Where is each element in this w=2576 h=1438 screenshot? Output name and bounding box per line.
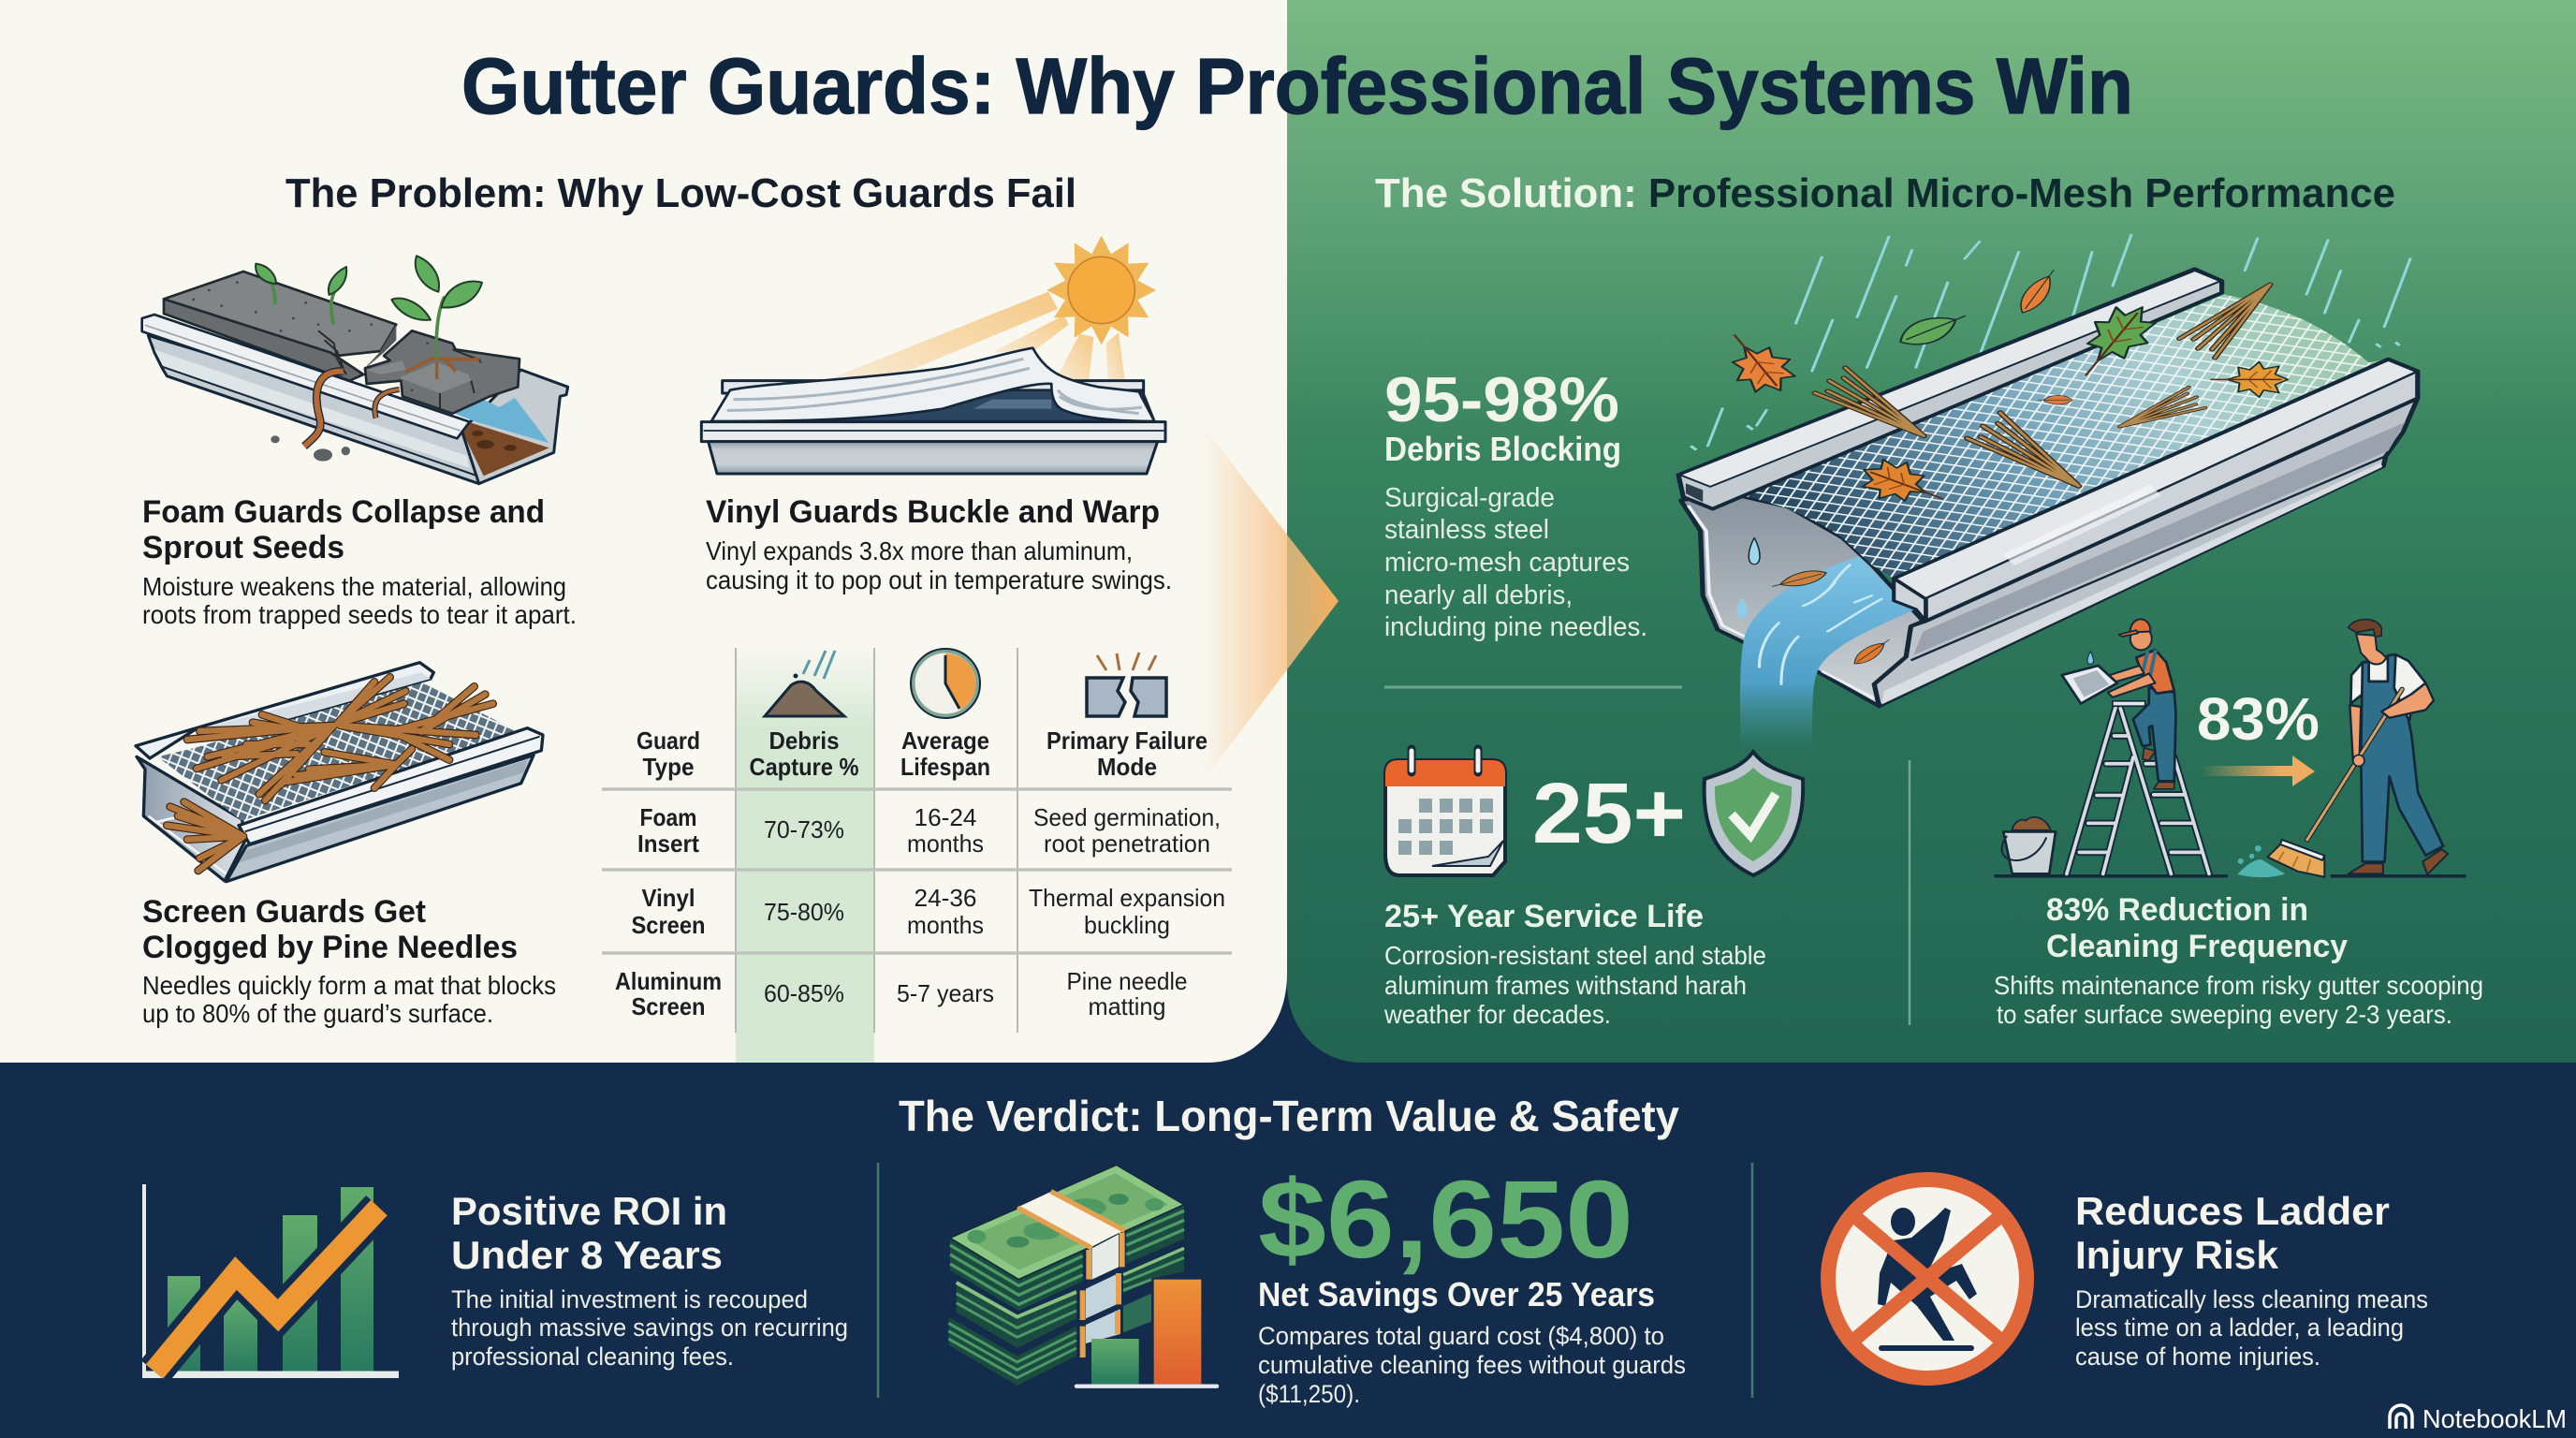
text: ladder injury risk: cause of home injuries. [2075,1343,2320,1371]
stat: $6,650 net savings: Net Savings Over 25 Years [1258,1275,1655,1313]
icon: vinyl guard buckling under the sun [701,236,1165,474]
table row: aluminum screen: matting [1088,992,1166,1020]
text: service life [1383,899,1766,1029]
icon: screen guard clogged by pine needles [136,663,543,882]
table row: aluminum screen: 5-7 years [897,979,994,1007]
text: screen guards: up to 80% of the guard’s surface. [142,999,493,1028]
table row: foam insert: Insert [637,829,699,858]
text: positive ROI: Positive ROI in [451,1189,727,1233]
text: screen guards [142,894,556,1028]
panel: the solution (green) [1287,0,2576,1063]
bottom stack [948,1317,1076,1386]
text: service life: weather for decades. [1383,1000,1611,1029]
text: positive ROI: Under 8 Years [451,1233,723,1277]
table row: foam insert: Foam [640,803,696,831]
gutter interior [1681,493,1924,706]
back rail [1678,269,2222,509]
table row: foam insert: root penetration [1044,829,1210,858]
table row: foam insert: 16-24 [914,803,977,831]
leaves and needles [1708,324,1807,401]
text: cleaning frequency: Shifts maintenance from risky gutter scooping [1994,971,2483,1000]
icon: broken panel [1087,653,1166,716]
text: screen guards: Clogged by Pine Needles [142,930,518,965]
table header: Guard [637,726,700,755]
text: cleaning frequency: 83% Reduction in [2046,892,2308,928]
text: service life: 25+ Year Service Life [1384,899,1704,934]
text: cleaning frequency: Cleaning Frequency [2046,929,2348,964]
arrow: problem to solution [1203,426,1339,782]
workers, ladder, bucket and broom [1996,619,2465,877]
stat: 95-98% debris blocking: nearly all debris, [1384,580,1573,610]
illustration: micro-mesh gutter in rain [1678,235,2418,749]
icon: shield [1705,752,1803,875]
stat: $6,650 net savings: Compares total guard cost ($4,800) to [1258,1322,1664,1350]
comparison bars [1091,1339,1139,1384]
text: foam guards: Moisture weakens the material, allowing [142,572,566,601]
front face [1874,398,2418,706]
icon: calendar [1385,749,1505,875]
waterfall [1740,556,1916,749]
table header: Type [642,753,695,781]
table header [637,726,1208,781]
stat: 25+: 25+ [1532,766,1686,861]
logo: NotebookLM: NotebookLM [2422,1404,2567,1433]
text: positive ROI [451,1189,848,1371]
text: ladder injury risk: Reduces Ladder [2075,1189,2390,1233]
icon: foam guard collapsing with sprouts [142,256,568,484]
chart: positive ROI [144,1184,399,1376]
stat: 95-98% debris blocking: micro-mesh captures [1384,548,1630,578]
text: positive ROI: The initial investment is recouped [451,1285,808,1313]
stat: 83%: 83% [2197,685,2320,753]
ground lines [1996,872,2465,881]
icon: debris pile [765,651,844,716]
stat: 95-98% debris blocking [1384,364,1647,642]
icon: money stack with bars [948,1165,1217,1387]
text: vinyl guards: Vinyl Guards Buckle and Warp [706,494,1160,530]
text: ladder injury risk: Injury Risk [2075,1233,2279,1277]
comparison table [602,648,1232,1063]
table header: Primary Failure [1046,726,1208,755]
text: positive ROI: professional cleaning fees. [451,1343,734,1371]
table row: vinyl screen [631,884,1225,939]
table row: vinyl screen: months [907,911,984,939]
stat: $6,650 net savings: $6,650 [1258,1158,1633,1282]
text: screen guards: Needles quickly form a mat that blocks [142,971,556,1000]
table header: Lifespan [900,753,990,781]
text: foam guards: roots from trapped seeds to tear it apart. [142,600,577,629]
stat: 95-98% debris blocking: stainless steel [1384,515,1549,545]
text: cleaning frequency [1994,892,2483,1029]
text: vinyl guards: Vinyl expands 3.8x more than aluminum, [706,536,1133,565]
table row: vinyl screen: Vinyl [642,884,695,912]
text: ladder injury risk [2075,1189,2428,1371]
middle stack [957,1281,1076,1348]
table row: foam insert: Seed germination, [1033,803,1221,831]
icon: clock [911,649,980,718]
table row: vinyl screen: Screen [631,911,706,939]
table row: vinyl screen: 24-36 [914,884,977,912]
panel: the problem (cream) [0,0,1287,1063]
heading: the problem: The Problem: Why Low-Cost Guards Fail [285,170,1076,216]
text: foam guards: Foam Guards Collapse and [142,494,545,530]
front rail [1894,360,2418,621]
text: positive ROI: through massive savings on recurring [451,1313,848,1342]
rain [1707,235,2410,446]
icon: ladder [2067,701,2209,873]
table row: aluminum screen [615,967,1187,1020]
stat: 95-98% debris blocking: Debris Blocking [1384,430,1621,468]
text: ladder injury risk: less time on a ladder, a leading [2075,1313,2404,1342]
stat: 95-98% debris blocking: Surgical-grade [1384,483,1555,513]
table row: foam insert: months [907,829,984,858]
table row: aluminum screen: Aluminum [615,967,722,995]
text: service life: Corrosion-resistant steel and stable [1384,941,1766,970]
text: ladder injury risk: Dramatically less cleaning means [2075,1285,2428,1313]
text: cleaning frequency: to safer surface sweeping every 2-3 years. [1997,1000,2452,1029]
title: Gutter Guards: Why Professional Systems Win [461,42,2133,130]
text: foam guards: Sprout Seeds [142,530,344,565]
table header: Mode [1097,753,1157,781]
table row: vinyl screen: 75-80% [764,898,844,926]
feature: 25+ year service life [1383,749,1803,1029]
icon: bucket [2002,817,2056,873]
table row: vinyl screen: Thermal expansion [1029,884,1225,912]
feature: 83% reduction illustration [1996,619,2465,877]
stat: $6,650 net savings [1258,1158,1686,1408]
heading: the solution: The Solution: Professional Micro-Mesh Performance [1375,170,2395,216]
currency band [1017,1192,1125,1247]
stat: $6,650 net savings: cumulative cleaning fees without guards [1258,1351,1686,1379]
text: screen guards: Screen Guards Get [142,894,426,930]
worker on ladder [2062,619,2175,789]
table header: Capture % [749,753,859,781]
table row: foam insert: 70-73% [764,815,844,844]
stat: 95-98% debris blocking: 95-98% [1384,364,1619,435]
heading: the verdict: The Verdict: Long-Term Value & Safety [899,1092,1679,1140]
table row: vinyl screen: buckling [1084,911,1170,939]
text: foam guards [142,494,577,629]
stat: $6,650 net savings: ($11,250). [1258,1380,1360,1408]
table row: aluminum screen: Screen [631,992,706,1020]
table row: foam insert [637,803,1221,858]
stat: 95-98% debris blocking: including pine needles. [1384,612,1647,642]
text: vinyl guards: causing it to pop out in temperature swings. [706,565,1172,594]
micro-mesh [1730,295,2388,579]
table header: Average [901,726,989,755]
text: vinyl guards [706,494,1172,594]
table header: Debris [769,726,839,755]
text: service life: aluminum frames withstand harah [1384,971,1747,1000]
table row: aluminum screen: 60-85% [764,979,844,1007]
arrow [2200,756,2315,786]
icon: no ladder falls sign [1828,1180,2027,1378]
worker with broom [2237,620,2448,877]
table row: aluminum screen: Pine needle [1067,967,1187,995]
top stack [950,1238,1083,1311]
